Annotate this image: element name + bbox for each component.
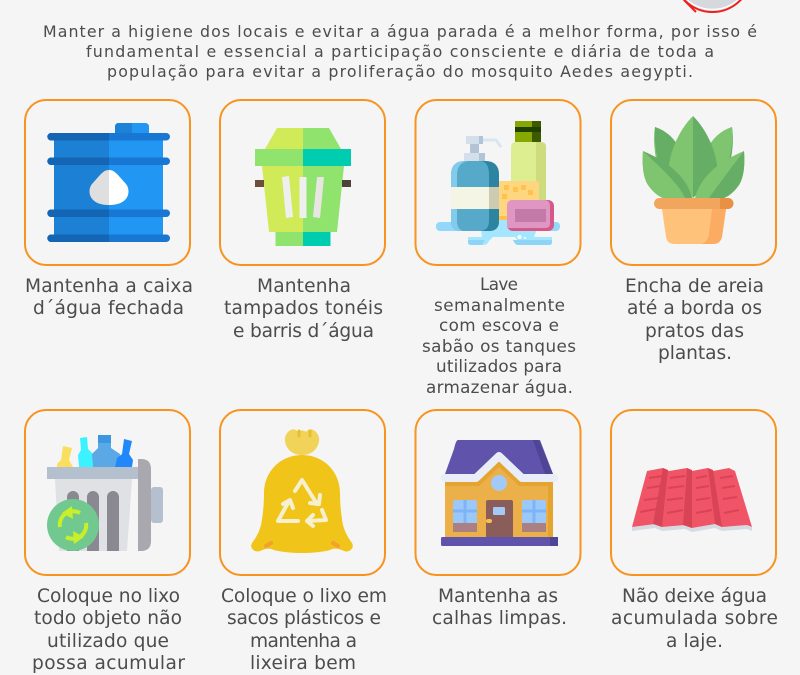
icon: lidded barrel (255, 128, 351, 246)
icon: water tank (47, 123, 170, 242)
panel: caixa d'água (25, 100, 193, 319)
intro text: Manter a higiene dos locais e evitar a água parada é a melhor forma, por isso é (43, 22, 757, 41)
label (25, 276, 193, 319)
panel: sacos plásticos (220, 410, 387, 674)
icon: roof tiles (632, 468, 752, 532)
label (221, 586, 387, 674)
label: utilizados para (436, 356, 562, 376)
label: plantas. (658, 343, 732, 364)
label: mantenha a (250, 631, 357, 652)
icon: soap and cleaning products (436, 121, 560, 245)
icon: recycling bin with bottles (47, 435, 163, 551)
label: Mantenha (257, 276, 351, 297)
label: Coloque no lixo (37, 586, 180, 607)
label: tampados tonéis (224, 298, 383, 319)
panel: lavar tanques (416, 100, 580, 397)
label (32, 586, 185, 674)
panel: calhas (416, 410, 580, 629)
label: sacos plásticos e (227, 608, 381, 629)
label: Mantenha as (438, 586, 558, 607)
label: e barris d´água (233, 321, 374, 342)
label (422, 274, 576, 397)
icon: house (441, 440, 558, 546)
label: lixeira bem (250, 653, 356, 674)
label: d´água fechada (33, 298, 184, 319)
label: semanalmente (434, 295, 565, 315)
intro text: fundamental e essencial a participação consciente e diária de toda a (86, 42, 714, 61)
label (611, 586, 778, 652)
panel: areia nos pratos (611, 100, 776, 364)
label: calhas limpas. (432, 608, 567, 629)
label: armazenar água. (426, 377, 573, 397)
label: Coloque o lixo em (221, 586, 387, 607)
label: Encha de areia (625, 276, 764, 297)
intro text: população para evitar a proliferação do mosquito Aedes aegypti. (107, 62, 693, 81)
label: com escova e (439, 315, 559, 335)
icon: potted plant (643, 116, 744, 244)
label (625, 276, 764, 364)
label: Lave (480, 274, 518, 294)
label (432, 586, 567, 629)
label: utilizado que (47, 631, 169, 652)
label: possa acumular (32, 653, 185, 674)
label: até a borda os (627, 298, 762, 319)
label: Mantenha a caixa (25, 276, 193, 297)
label: Não deixe água (622, 586, 767, 607)
icon: crossed-out mosquito sign (674, 0, 752, 12)
panel: tonéis e barris (220, 100, 385, 342)
intro text (43, 22, 757, 81)
label: acumulada sobre (611, 608, 778, 629)
panel: lixo (25, 410, 190, 674)
label: sabão os tanques (422, 336, 576, 356)
label: a laje. (666, 631, 723, 652)
icon: yellow garbage bag (251, 429, 353, 553)
label: todo objeto não (34, 608, 182, 629)
label: pratos das (645, 321, 744, 342)
panel: laje (611, 410, 778, 652)
label (224, 276, 383, 342)
